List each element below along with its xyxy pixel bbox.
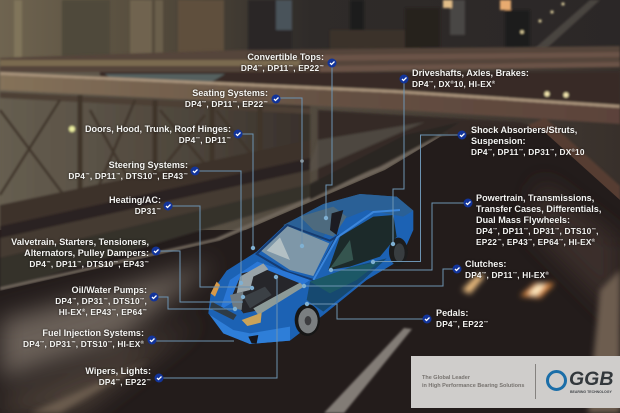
callout: Fuel Injection Systems: [22, 328, 144, 349]
roof opening and seats: [300, 207, 347, 237]
callout: Driveshafts, Axles, Brakes: [412, 68, 529, 89]
callout: Steering Systems: DP4™, DP11™, DTS10™, EP43™: [68, 171, 188, 181]
divider: [535, 364, 536, 399]
callout: Valvetrain: DP4™, DP11™, DTS10™, EP43™: [29, 259, 149, 269]
callout: Seating Systems: Seating Systems:: [192, 88, 268, 98]
tagline: [422, 375, 524, 388]
grille and headlight: [210, 302, 237, 320]
callout: Oil/Water Pumps: HI-EX®, EP43™, EP64™: [59, 307, 147, 317]
door panels: [307, 258, 387, 312]
callout: Driveshafts, Axles, Brakes: Driveshafts, Axles, Brakes:: [412, 68, 529, 78]
callout: Heating/AC: [108, 195, 161, 216]
callout: Fuel Injection Systems: DP4™, DP31™, DTS10™, HI-EX®: [23, 339, 144, 349]
callout: Pedals: DP4™, EP22™: [436, 319, 488, 329]
bumper: [210, 315, 290, 344]
callout: Clutches: Clutches:: [465, 259, 506, 269]
callout: Convertible Tops: [240, 52, 324, 73]
callout: Heating/AC: Heating/AC:: [109, 195, 161, 205]
callout: Wipers, Lights: DP4™, EP22™: [99, 377, 151, 387]
windscreen: [261, 226, 329, 276]
callout: Wipers, Lights: Wipers, Lights:: [85, 366, 151, 376]
callout: Seating Systems: [184, 88, 268, 109]
callout: Steering Systems: [68, 160, 188, 181]
callout: Convertible Tops: DP4™, DP11™, EP22™: [241, 63, 324, 73]
logo wordmark: GGB: [569, 368, 613, 390]
callout: Oil/Water Pumps: DP4™, DP31™, DTS10™,: [55, 296, 147, 306]
callout: Pedals: Pedals:: [436, 308, 468, 318]
callout: Valvetrain: [11, 237, 149, 269]
tagline: The Global Leader: [422, 375, 470, 381]
callout: Wipers, Lights: [85, 366, 151, 387]
callout: Fuel Injection Systems: Fuel Injection Systems:: [42, 328, 144, 338]
callout: Powertrain: [476, 193, 601, 247]
callout: Driveshafts, Axles, Brakes: DP4™, DX®10, HI-EX®: [412, 79, 495, 89]
callout: Steering Systems: Steering Systems:: [109, 160, 188, 170]
callout: Convertible Tops: Convertible Tops:: [247, 52, 324, 62]
callout: Doors, Hood, Trunk, Roof Hinges: DP4™, DP11™: [179, 135, 231, 145]
callout: Heating/AC: DP31™: [135, 206, 161, 216]
rear wheel: [389, 238, 408, 266]
tagline: in High Performance Bearing Solutions: [422, 382, 524, 388]
callout: Shock Absorbers: Suspension:: [471, 136, 526, 146]
callout: Powertrain: Transfer Cases, Differentials,: [476, 204, 601, 214]
callout: Oil/Water Pumps: Oil/Water Pumps:: [72, 285, 147, 295]
callout: Pedals: [436, 308, 488, 329]
logo ring icon: [546, 370, 567, 391]
callout: Shock Absorbers: [471, 125, 585, 157]
callout: Shock Absorbers: Shock Absorbers/Struts,: [471, 125, 577, 135]
callout: Shock Absorbers: DP4™, DP11™, DP31™, DX®10: [471, 147, 585, 157]
callout: Oil/Water Pumps: [55, 285, 147, 317]
hood and engine: [220, 262, 310, 310]
callout: Powertrain: EP22™, EP43™, EP64™, HI-EX®: [476, 237, 595, 247]
callout: Doors, Hood, Trunk, Roof Hinges: [84, 124, 231, 145]
callout: Seating Systems: DP4™, DP11™, EP22™: [185, 99, 268, 109]
callout: Clutches: [465, 259, 549, 280]
callout: Powertrain: Dual Mass Flywheels:: [476, 215, 570, 225]
callout: Valvetrain: Alternators, Pulley Dampers:: [24, 248, 149, 258]
callout: Powertrain: DP4™, DP11™, DP31™, DTS10™,: [476, 226, 599, 236]
logo subline: BEARING TECHNOLOGY: [570, 390, 612, 394]
car body: [208, 194, 413, 344]
side glass and rear cabin: [328, 215, 397, 270]
callout: Doors, Hood, Trunk, Roof Hinges: Doors, Hood, Trunk, Roof Hinges:: [85, 124, 231, 134]
callout: Clutches: DP4™, DP11™, HI-EX®: [465, 270, 549, 280]
panel: GGB logo banner: [411, 356, 620, 408]
callout: Valvetrain: Valvetrain, Starters, Tensioners,: [11, 237, 149, 247]
front wheel: [295, 304, 320, 336]
callout: Powertrain: Powertrain, Transmissions,: [476, 193, 594, 203]
